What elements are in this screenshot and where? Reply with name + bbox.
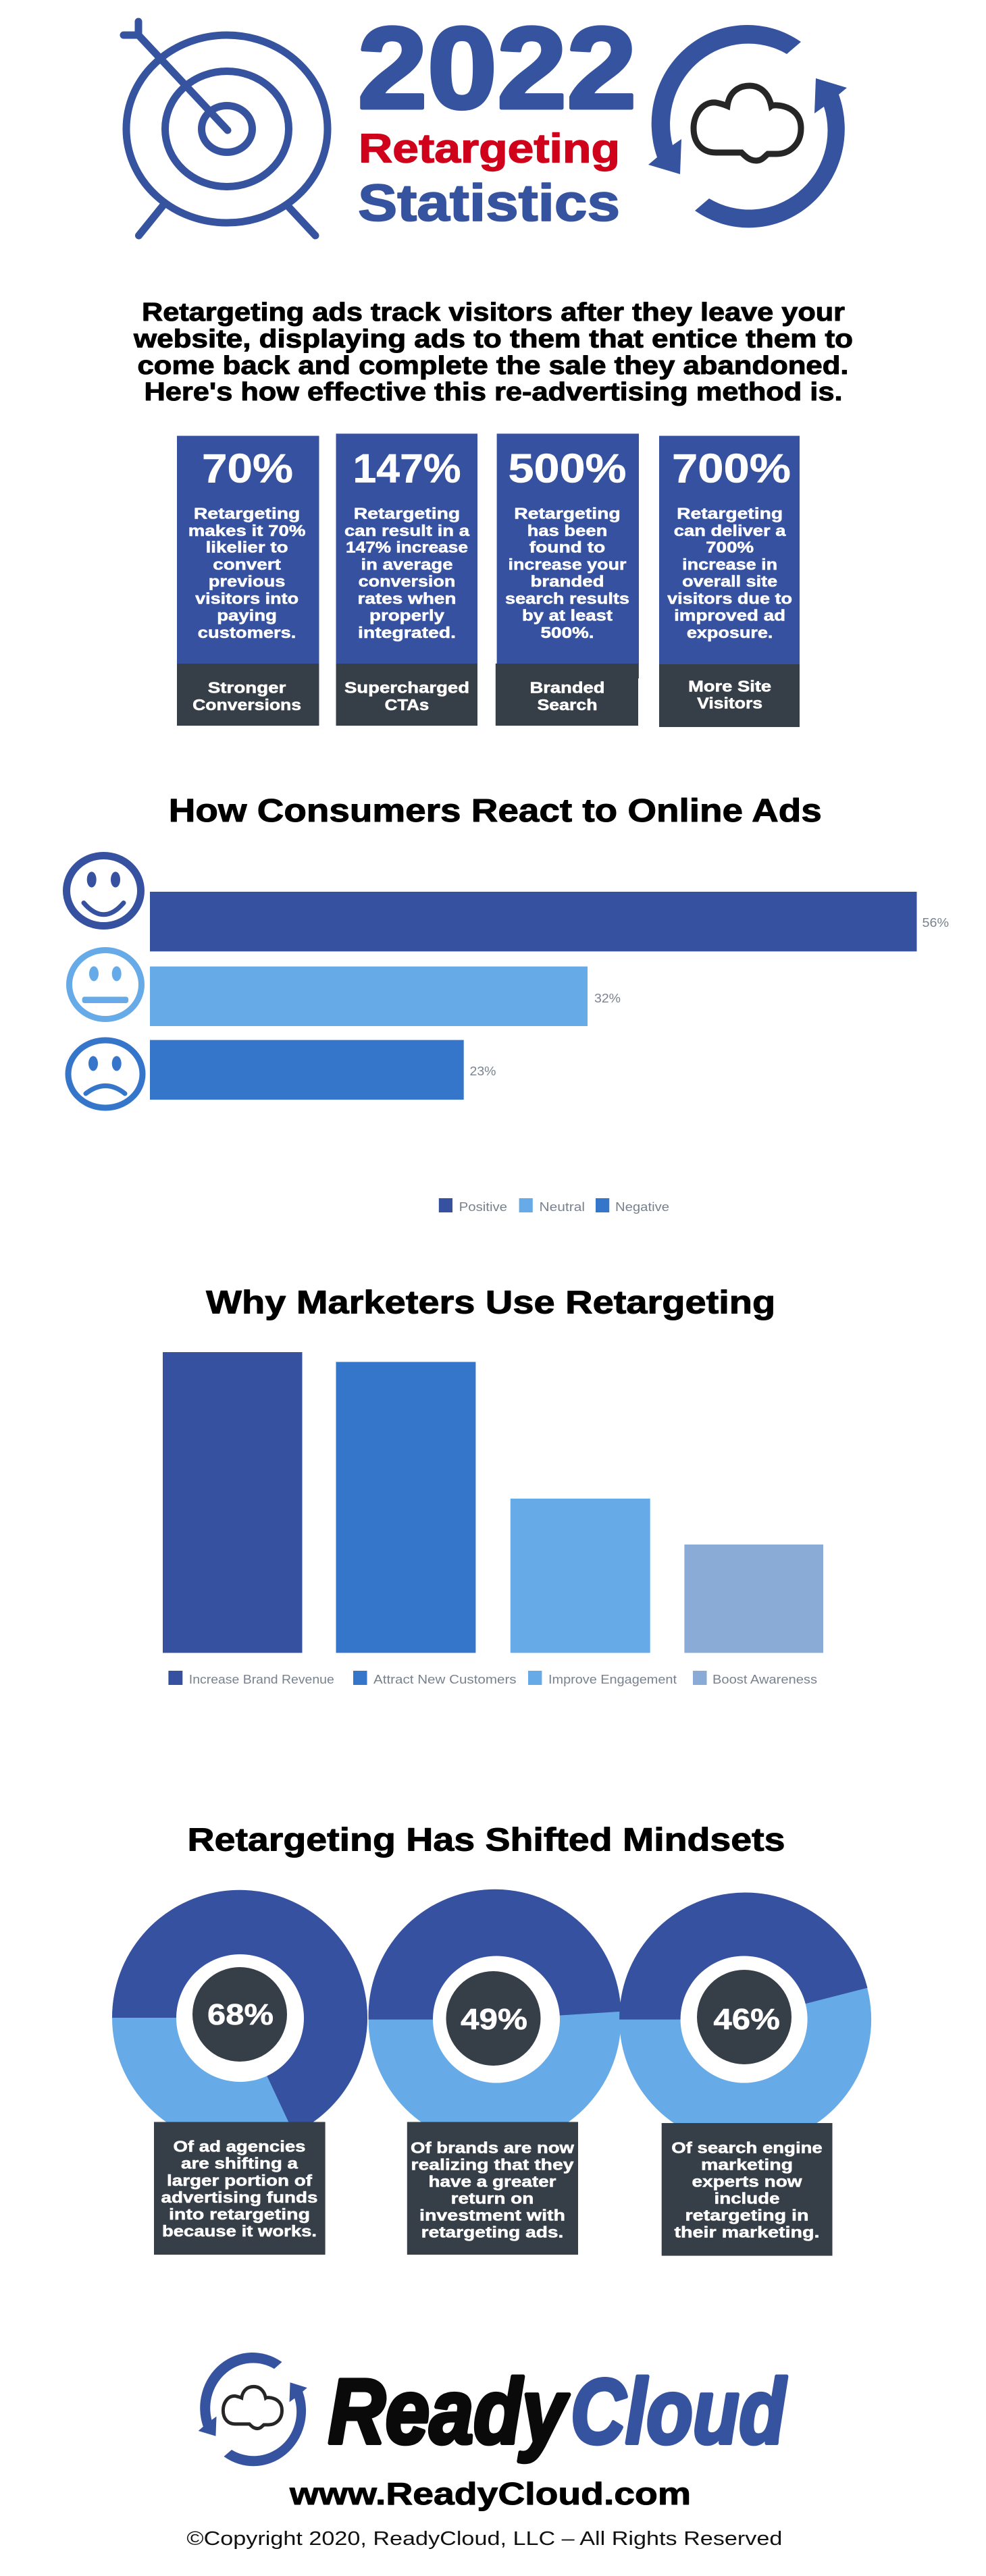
icon: logo cloud with cycle arrows: [199, 2353, 307, 2466]
footer logo: [199, 2353, 787, 2466]
panel: stat card 500%: 500%: [508, 446, 627, 491]
heading: Retargeting Has Shifted Mindsets: Retargeting Has Shifted Mindsets: [188, 1823, 785, 1858]
bar chart: consumer reactions: [150, 892, 949, 1100]
panel: stat card 500%: Search: [538, 696, 597, 714]
callout: ad agencies: are shifting a: [181, 2155, 298, 2172]
callout: search engine marketing experts: include: [715, 2189, 779, 2207]
value: 56%: 56%: [923, 915, 949, 930]
panel: stat card 500%: by at least: [522, 607, 613, 624]
panel: stat card 700%: 700%: [706, 539, 754, 556]
bar: improve engagement: [511, 1499, 650, 1653]
intro text: [133, 298, 853, 406]
panel: stat card 70%: 70%: [202, 446, 293, 491]
panel: stat card 70%: Retargeting: [194, 505, 300, 522]
panel: stat card 70%: Conversions: [192, 696, 301, 714]
callout: brands: have a greater: [428, 2172, 556, 2190]
copyright: ©Copyright 2020, ReadyCloud, LLC – All Rights Reserved: [186, 2528, 782, 2550]
donut: 68%: 68%: [207, 1998, 274, 2031]
panel: stat card 500%: increase your: [508, 556, 627, 573]
donut: 68%: [112, 1890, 367, 2145]
panel: stat card 147%: CTAs: [385, 696, 429, 714]
callout: brands: investment with: [419, 2206, 565, 2224]
value: 32%: 32%: [594, 991, 621, 1005]
callout: brands: Of brands are now: [411, 2139, 574, 2156]
callout: ad agencies: because it works.: [162, 2222, 317, 2240]
callout: brands: retargeting ads.: [421, 2223, 563, 2240]
panel: stat card 500%: search results: [505, 590, 629, 608]
panel: stat card 147%: integrated.: [358, 624, 456, 641]
panel: stat card 500%: branded: [531, 572, 604, 590]
legend: consumer reactions: [439, 1198, 669, 1214]
donut: 49%: 49%: [461, 2003, 527, 2036]
panel: stat card 700%: 700%: [672, 446, 791, 491]
callout: brands: [407, 2122, 578, 2255]
wordmark: Ready: Ready: [328, 2360, 569, 2463]
title: Retargeting: Retargeting: [359, 126, 620, 171]
title: 2022: 2022: [358, 3, 636, 133]
panel: stat card 700%: increase in: [682, 556, 777, 573]
callout: ad agencies: larger portion of: [167, 2172, 312, 2189]
callout: brands: return on: [451, 2189, 534, 2207]
callout: search engine marketing experts: marketing: [701, 2155, 793, 2173]
legend: consumer reactions: Positive: [459, 1200, 507, 1214]
panel: stat card 147%: rates when: [358, 590, 457, 608]
callout: brands: realizing that they: [411, 2155, 574, 2173]
panel: stat card 700%: can deliver a: [674, 522, 786, 539]
panel: stat card 70%: convert: [213, 556, 281, 573]
panel: stat card 500%: 500%.: [540, 624, 594, 641]
panel: stat card 500%: has been: [527, 522, 607, 539]
bar: negative 23%: [150, 1040, 464, 1100]
icon: sad face: [68, 1040, 142, 1108]
legend: why marketers use retargeting: Improve Engagement: [548, 1672, 677, 1686]
bar: increase brand revenue: [163, 1352, 303, 1653]
callout: ad agencies: [154, 2122, 326, 2255]
heading: How Consumers React to Online Ads: How Consumers React to Online Ads: [169, 793, 822, 829]
intro text: Here's how effective this re-advertising method is.: [145, 378, 843, 406]
callout: ad agencies: Of ad agencies: [173, 2138, 305, 2155]
website url: www.ReadyCloud.com: [289, 2476, 691, 2511]
bar: boost awareness: [684, 1545, 823, 1653]
value: 23%: 23%: [470, 1064, 496, 1078]
panel: stat card 70%: likelier to: [206, 539, 288, 556]
panel: stat card 70%: previous: [209, 572, 285, 590]
donut: 46%: 46%: [713, 2003, 780, 2036]
panel: stat card 147%: can result in a: [344, 522, 469, 539]
callout: search engine marketing experts: retargeting in: [685, 2206, 809, 2224]
legend: consumer reactions: Negative: [615, 1200, 669, 1214]
header: [124, 3, 847, 236]
panel: stat card 147%: Supercharged: [344, 679, 469, 697]
panel: stat card 500%: [496, 433, 639, 726]
panel: stat card 147%: 147%: [353, 446, 461, 491]
icon: neutral face: [69, 950, 142, 1019]
intro text: come back and complete the sale they abandoned.: [138, 352, 848, 380]
panel: stat card 700%: More Site: [688, 677, 771, 695]
callout: search engine marketing experts: their marketing.: [674, 2223, 820, 2240]
panel: stat card 700%: improved ad: [674, 607, 785, 624]
legend: why marketers use retargeting: Boost Awareness: [712, 1672, 817, 1686]
icon: target with arrow: [124, 22, 328, 236]
panel: stat card 70%: [177, 436, 319, 726]
panel: stat card 500%: Branded: [529, 679, 605, 697]
panel: stat card 700%: Visitors: [697, 695, 762, 712]
panel: stat card 70%: makes it 70%: [188, 522, 305, 539]
panel: stat card 70%: paying: [217, 607, 277, 624]
panel: stat card 700%: overall site: [682, 572, 777, 590]
panel: stat card 70%: visitors into: [195, 590, 299, 608]
panel: stat card 500%: Retargeting: [514, 505, 621, 522]
legend: consumer reactions: Neutral: [539, 1200, 585, 1214]
donut: 46%: [619, 1893, 871, 2145]
legend: why marketers use retargeting: [168, 1671, 817, 1686]
donut: 49%: [369, 1889, 621, 2146]
icon: happy face: [66, 856, 140, 926]
panel: stat card 700%: exposure.: [687, 624, 773, 641]
intro text: website, displaying ads to them that entice them to: [133, 325, 853, 353]
callout: search engine marketing experts: [662, 2123, 832, 2256]
panel: stat card 700%: visitors due to: [667, 590, 792, 608]
panel: stat card 147%: Retargeting: [354, 505, 460, 522]
heading: Why Marketers Use Retargeting: Why Marketers Use Retargeting: [206, 1285, 775, 1321]
bar: neutral 32%: [150, 967, 588, 1026]
callout: search engine marketing experts: experts now: [692, 2172, 802, 2190]
panel: stat card 700%: [659, 436, 800, 727]
panel: stat card 500%: found to: [529, 539, 605, 556]
panel: stat card 147%: 147% increase: [346, 539, 468, 556]
panel: stat card 70%: Stronger: [208, 679, 286, 697]
wordmark: Cloud: Cloud: [571, 2360, 787, 2463]
panel: stat card 147%: conversion: [359, 572, 455, 590]
icon: cloud with cycle arrows: [648, 25, 847, 227]
panel: stat card 147%: in average: [361, 556, 452, 573]
bar: positive 56%: [150, 892, 917, 951]
panel: stat card 70%: customers.: [198, 624, 296, 641]
intro text: Retargeting ads track visitors after they leave your: [142, 298, 845, 327]
legend: why marketers use retargeting: Attract New Customers: [373, 1672, 517, 1686]
bar chart: why marketers use retargeting: [163, 1352, 823, 1653]
panel: stat card 147%: [336, 433, 477, 726]
legend: why marketers use retargeting: Increase Brand Revenue: [189, 1672, 334, 1686]
title: Statistics: Statistics: [358, 174, 620, 232]
callout: ad agencies: into retargeting: [169, 2205, 310, 2223]
callout: search engine marketing experts: Of search engine: [671, 2139, 823, 2156]
callout: ad agencies: advertising funds: [161, 2189, 317, 2206]
panel: stat card 700%: Retargeting: [677, 505, 783, 522]
bar: attract new customers: [336, 1362, 475, 1653]
panel: stat card 147%: properly: [369, 607, 444, 624]
